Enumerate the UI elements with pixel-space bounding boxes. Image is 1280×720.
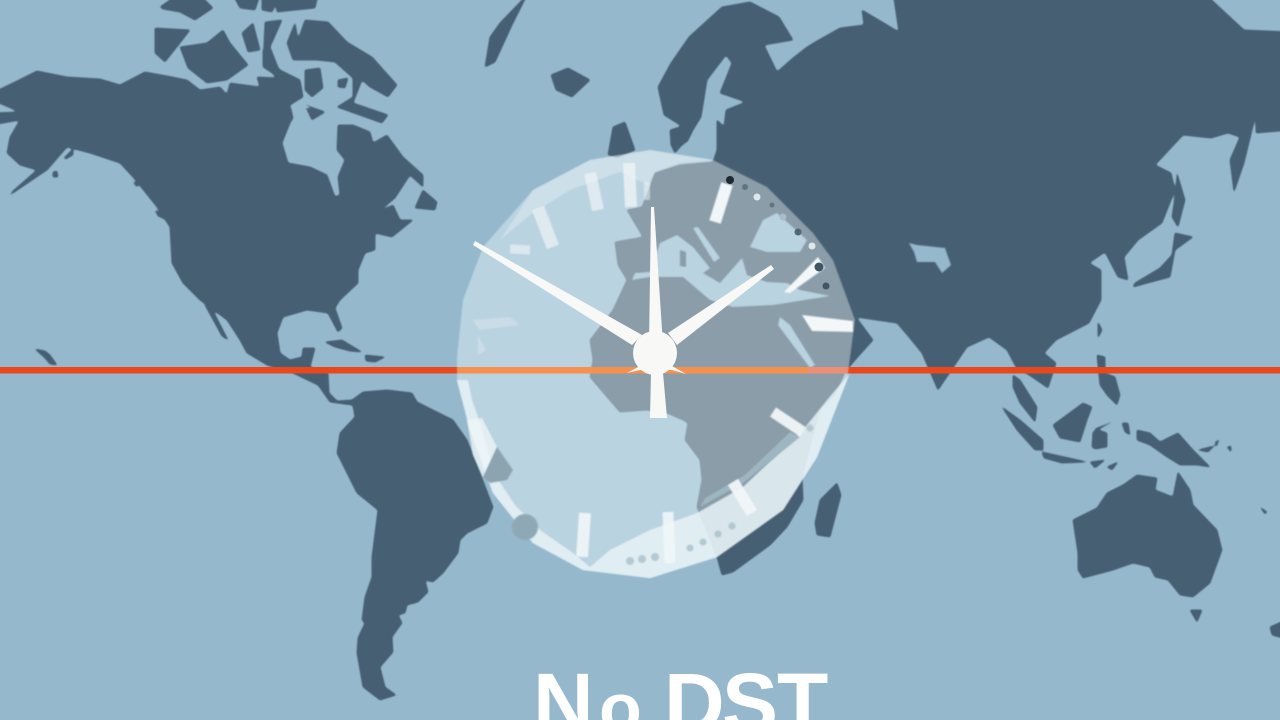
Red Sea <box>778 317 815 368</box>
grey box at left rim <box>483 447 513 483</box>
Lake Balkhash <box>909 243 951 273</box>
faint marks at left rim <box>472 317 520 355</box>
Baja California <box>205 305 228 340</box>
Iceland <box>551 68 590 97</box>
Adriatic Sea <box>693 227 720 262</box>
Taiwan and Philippines <box>1097 322 1120 405</box>
Arctic islands <box>155 0 397 123</box>
Greenland edge <box>485 0 527 67</box>
grey oval at lower rim <box>512 514 538 540</box>
clock rim highlight <box>457 373 850 578</box>
hour and minute hands <box>473 207 774 418</box>
Cuba and Caribbean <box>325 340 385 362</box>
Eurasia and Africa <box>590 0 1280 575</box>
Newfoundland <box>415 190 437 210</box>
tapered ticks at right <box>784 257 853 332</box>
Sardinia <box>680 250 686 267</box>
Java and Lesser Sunda <box>1042 452 1118 470</box>
blotches along rim <box>626 424 814 565</box>
Mediterranean Sea <box>632 235 830 307</box>
Madagascar <box>815 483 841 537</box>
Malay Peninsula <box>1013 375 1037 422</box>
New Zealand <box>1260 507 1280 640</box>
South America <box>337 390 493 700</box>
Sakhalin and Japan <box>1133 173 1193 287</box>
Aleutian and Alaska islands <box>53 149 172 222</box>
Tasmania <box>1190 610 1202 622</box>
Sulawesi <box>1092 422 1112 449</box>
Hudson Strait channels <box>290 103 310 110</box>
Moluccas <box>1122 423 1130 435</box>
clock <box>457 150 855 578</box>
Hawaii <box>35 349 57 365</box>
Great Britain and Ireland <box>608 122 635 157</box>
Australia <box>1073 472 1222 597</box>
North America <box>0 50 423 405</box>
top rim highlight <box>500 150 713 240</box>
New Guinea <box>1137 430 1231 467</box>
grey strip along rim <box>700 432 800 507</box>
Borneo <box>1053 403 1092 442</box>
hour ticks <box>510 163 803 563</box>
white patch at left rim <box>467 418 497 477</box>
equator highlight through clock <box>458 367 808 374</box>
Denmark <box>670 127 688 153</box>
equator line <box>0 367 1280 374</box>
seas and lakes <box>290 103 951 368</box>
clock face <box>457 150 855 578</box>
rim marks <box>467 317 814 565</box>
Sumatra <box>1002 407 1043 450</box>
Black Sea <box>750 213 807 252</box>
minute dots <box>726 176 830 290</box>
